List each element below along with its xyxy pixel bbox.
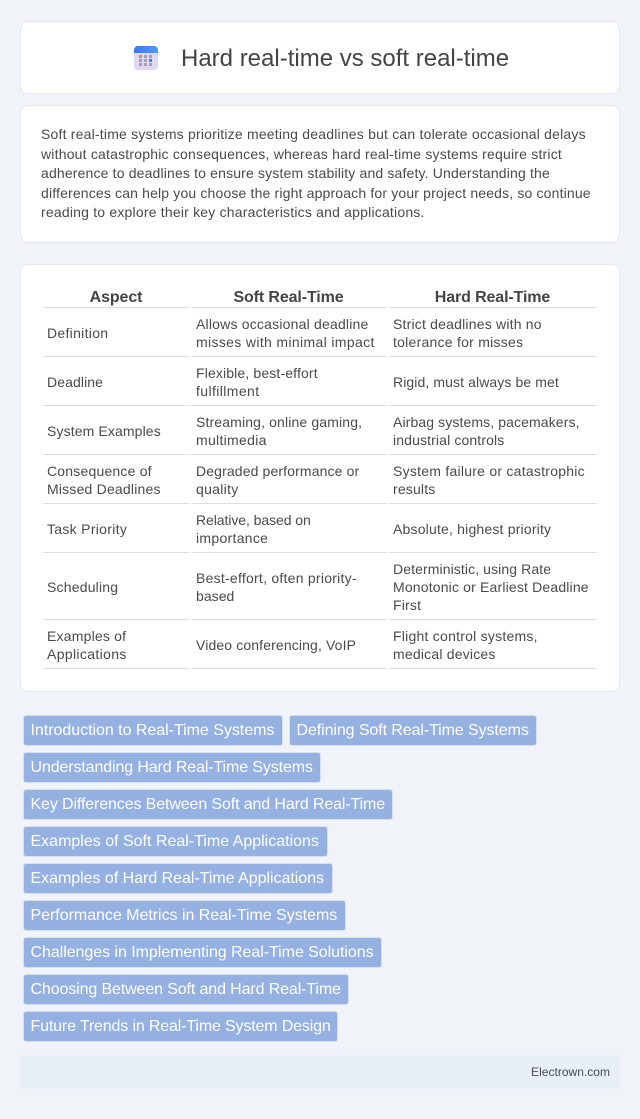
row: Examples of Applications: [47, 628, 127, 662]
intro paragraph: without catastrophic consequences, whereas hard real-time systems require strict: [41, 146, 562, 162]
tag: [23, 1011, 338, 1042]
row: Deadline: Deadline: [47, 374, 103, 390]
tag: Key Differences Between Soft and Hard Real-Time: [30, 796, 385, 813]
comparison table panel: [20, 264, 620, 692]
row: System Examples: System Examples: [47, 423, 161, 439]
soft: definition: Allows occasional deadline: [196, 316, 369, 332]
soft: consequence: quality: [196, 481, 239, 497]
intro paragraph: differences can help you choose the right approach for your project needs, so continue: [41, 184, 591, 200]
soft: task priority: Relative, based on: [196, 512, 311, 528]
tag: [23, 789, 393, 820]
tag: Performance Metrics in Real-Time Systems: [30, 907, 337, 924]
intro paragraph: [41, 126, 591, 220]
topic tags: [23, 715, 537, 1042]
soft: consequence: Degraded performance or: [196, 463, 359, 479]
row: Consequence: Missed Deadlines: [47, 481, 161, 497]
footer source: Electrown.com: [531, 1065, 610, 1079]
hard: applications: [393, 628, 538, 662]
hard: applications: medical devices: [393, 646, 496, 662]
table header: Hard Real-Time: Hard Real-Time: [435, 289, 550, 306]
hard: definition: [393, 316, 542, 350]
table header: Soft Real-Time: Soft Real-Time: [233, 289, 344, 306]
footer: [20, 1055, 620, 1089]
soft: deadline: [196, 365, 318, 399]
hard: task priority: Absolute, highest priority: [393, 521, 551, 537]
hard: scheduling: First: [393, 597, 421, 613]
soft: definition: [196, 316, 375, 350]
tag: Examples of Hard Real-Time Applications: [30, 870, 324, 887]
soft: task priority: importance: [196, 530, 268, 546]
soft: task priority: [196, 512, 311, 546]
hard: scheduling: [393, 561, 589, 613]
hard: system examples: Airbag systems, pacemakers,: [393, 414, 580, 430]
hard: consequence: [393, 463, 585, 497]
soft: consequence: [196, 463, 359, 497]
tag: Introduction to Real-Time Systems: [30, 722, 274, 739]
row: Consequence: [47, 463, 161, 497]
tag: [23, 826, 328, 857]
hard: consequence: results: [393, 481, 435, 497]
tag: Defining Soft Real-Time Systems: [296, 722, 529, 739]
soft: scheduling: [196, 570, 357, 604]
hard: applications: Flight control systems,: [393, 628, 538, 644]
soft: applications: Video conferencing, VoIP: [196, 637, 356, 653]
soft: scheduling: Best-effort, often priority-: [196, 570, 357, 586]
hard: definition: Strict deadlines with no: [393, 316, 542, 332]
intro paragraph: Soft real-time systems prioritize meeting deadlines but can tolerate occasional delays: [41, 126, 586, 142]
intro paragraph: adherence to deadlines to ensure system stability and safety. Understanding the: [41, 165, 550, 181]
hard: consequence: System failure or catastrophic: [393, 463, 585, 479]
soft: system examples: [196, 414, 362, 448]
hard: deadline: Rigid, must always be met: [393, 374, 559, 390]
tag: [289, 715, 537, 746]
row: Task Priority: Task Priority: [47, 521, 127, 537]
row: Scheduling: Scheduling: [47, 579, 118, 595]
hard: definition: tolerance for misses: [393, 334, 523, 350]
row: Examples of Applications: Applications: [47, 646, 127, 662]
tag: Challenges in Implementing Real-Time Solutions: [30, 944, 374, 961]
tag: [23, 974, 349, 1005]
intro text panel: [20, 105, 620, 243]
tag: [23, 752, 321, 783]
soft: scheduling: based: [196, 588, 234, 604]
hard: system examples: [393, 414, 580, 448]
tag: Future Trends in Real-Time System Design: [30, 1018, 331, 1035]
soft: system examples: multimedia: [196, 432, 267, 448]
soft: system examples: Streaming, online gaming,: [196, 414, 362, 430]
tag: Understanding Hard Real-Time Systems: [30, 759, 313, 776]
table header: Aspect: Aspect: [90, 289, 142, 306]
tag: Examples of Soft Real-Time Applications: [30, 833, 319, 850]
intro paragraph: reading to explore their key characteristics and applications.: [41, 204, 425, 220]
hard: scheduling: Deterministic, using Rate: [393, 561, 551, 577]
icon: calendar: [134, 46, 158, 70]
row: Consequence: Consequence of: [47, 463, 152, 479]
tag: [23, 937, 382, 968]
tag: [23, 900, 346, 931]
tag: [23, 715, 283, 746]
tag: [23, 863, 333, 894]
hard: scheduling: Monotonic or Earliest Deadline: [393, 579, 589, 595]
soft: deadline: Flexible, best-effort: [196, 365, 318, 381]
tag: Choosing Between Soft and Hard Real-Time: [30, 981, 341, 998]
row: Definition: Definition: [47, 325, 108, 341]
soft: definition: misses with minimal impact: [196, 334, 375, 350]
row: Examples of Applications: Examples of: [47, 628, 126, 644]
title: Hard real-time vs soft real-time: [181, 45, 509, 72]
hard: system examples: industrial controls: [393, 432, 504, 448]
soft: deadline: fulfillment: [196, 383, 260, 399]
header card: [20, 21, 620, 94]
